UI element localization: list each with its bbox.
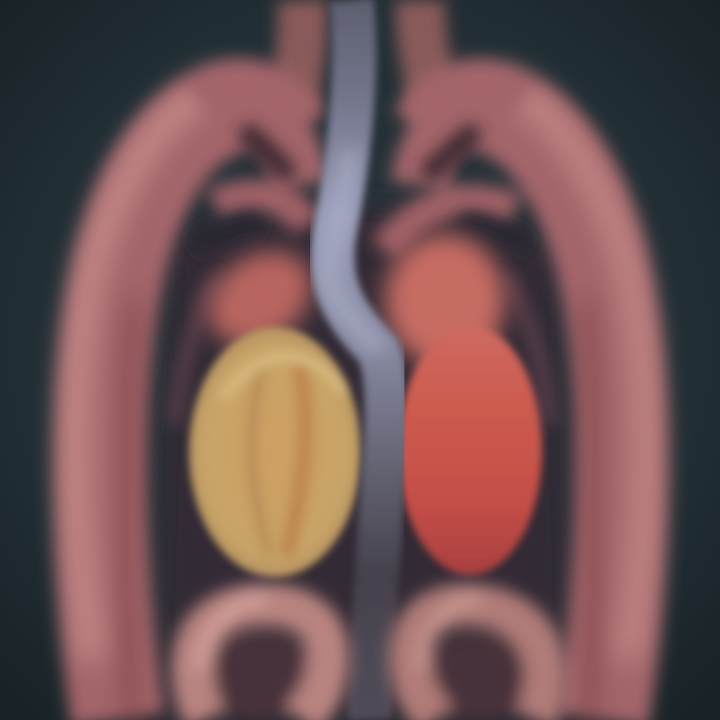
bottom left loop xyxy=(193,598,328,720)
dark slots under the upper arches xyxy=(205,135,515,240)
bottom right loop xyxy=(410,598,545,720)
neck vessels xyxy=(290,0,436,110)
red organ xyxy=(398,325,542,575)
pink streaks beside the organs xyxy=(175,280,550,420)
right rib arch xyxy=(385,82,645,720)
organ surface streaks xyxy=(225,357,342,550)
chest cavity shadow xyxy=(155,205,572,720)
left rib arch xyxy=(75,82,308,720)
central grey vessel xyxy=(328,0,387,720)
yellow organ xyxy=(189,327,361,577)
upper pink lobes xyxy=(190,231,505,366)
